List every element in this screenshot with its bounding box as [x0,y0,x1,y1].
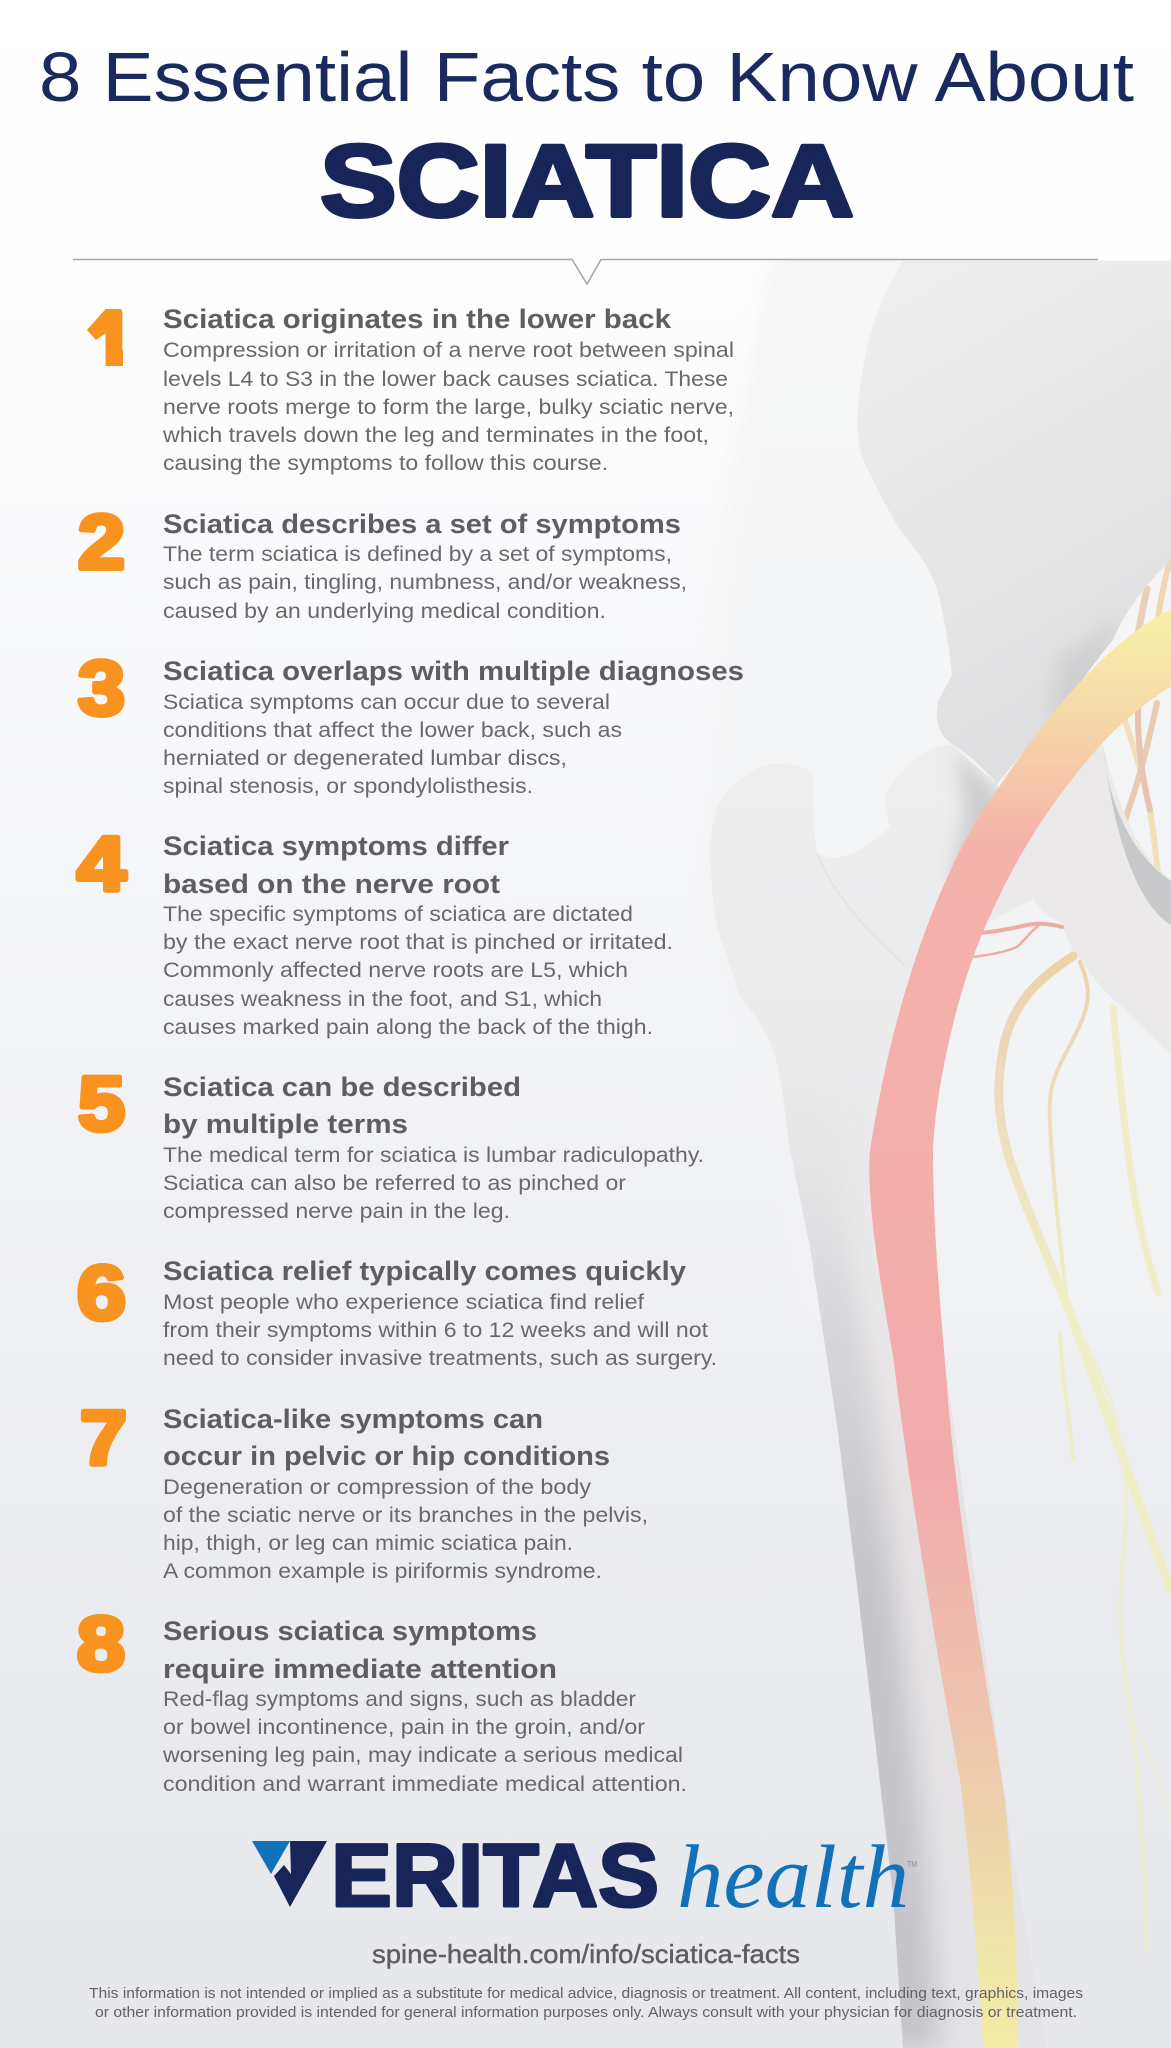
fact 1 heading: Sciatica originates in the lower back [163,304,672,334]
fact 4 body [163,902,673,1039]
fact 3 [78,646,744,798]
fact 3 heading: Sciatica overlaps with multiple diagnoses [163,656,744,686]
fact 6 body: need to consider invasive treatments, such as surgery. [163,1346,717,1370]
fact 6 heading: Sciatica relief typically comes quickly [163,1256,686,1286]
fact 1 body: causing the symptoms to follow this course. [163,451,608,475]
fact 8 heading: require immediate attention [163,1654,557,1684]
pale pelvis backdrop [697,180,1171,1320]
fact 8 body: or bowel incontinence, pain in the groin, and/or [163,1715,645,1739]
sciatic nerve [869,609,1171,2048]
fact 2 body: The term sciatica is defined by a set of symptoms, [163,542,672,566]
fact 8 body [162,1687,687,1796]
Veritas Health logo [252,1825,917,1927]
divider with notch [73,260,1098,284]
fact 7 body: Degeneration or compression of the body [163,1475,591,1499]
fact 7 body: hip, thigh, or leg can mimic sciatica pain. [163,1531,573,1555]
fact 1 body: which travels down the leg and terminates in the foot, [162,423,709,447]
fact 7 body [163,1475,648,1583]
website url: spine-health.com/info/sciatica-facts [372,1939,800,1969]
ischium crescent shadow [1103,744,1171,925]
fact 4 body: Commonly affected nerve roots are L5, which [163,958,628,982]
ilium shadow [1052,628,1112,710]
fact 1 body: nerve roots merge to form the large, bulky sciatic nerve, [163,395,734,419]
number 5: 5 [78,1062,125,1148]
fact 5 body: Sciatica can also be referred to as pinched or [163,1171,626,1195]
fact 4 body: by the exact nerve root that is pinched or irritated. [163,930,673,954]
fact 3 body: conditions that affect the lower back, such as [163,718,622,742]
number 6: 6 [77,1250,126,1336]
fact 7 body: of the sciatic nerve or its branches in the pelvis, [163,1503,648,1527]
fact 8 body: Red-flag symptoms and signs, such as bladder [163,1687,636,1711]
illustration: hip and sciatic nerve [697,180,1171,2048]
fact 7 heading: occur in pelvic or hip conditions [163,1441,610,1471]
number 3: 3 [78,646,125,732]
fact 4 body: The specific symptoms of sciatica are dictated [163,902,633,926]
fact 7 [80,1396,648,1583]
fact 8 [77,1602,687,1796]
fact 6 body: from their symptoms within 6 to 12 weeks and will not [163,1318,708,1342]
fact 2 [78,500,687,623]
number 7: 7 [80,1396,127,1482]
fact 4 [77,822,673,1039]
logo wordmark: ERITAS: ERITAS [331,1825,659,1925]
fact 3 body: spinal stenosis, or spondylolisthesis. [163,774,533,798]
number 4: 4 [77,822,126,908]
femur [711,748,1012,2048]
femur shaft shading [802,1194,946,2048]
fact 4 heading: Sciatica symptoms differ [163,831,510,861]
fact 7 heading [163,1404,610,1471]
fact 5 heading: Sciatica can be described [163,1072,521,1102]
femoral neck shading [948,757,998,874]
fact 8 body: worsening leg pain, may indicate a serious medical [162,1743,683,1767]
fact 5 body: The medical term for sciatica is lumbar radiculopathy. [163,1143,704,1167]
number 2: 2 [78,500,125,586]
fact 1 body: levels L4 to S3 in the lower back causes sciatica. These [163,367,728,391]
fact 5 heading: by multiple terms [163,1109,408,1139]
lower nerve branches [999,956,1171,1952]
fact 3 body [163,690,622,798]
trochanter ridge [817,853,905,965]
fact 5 [78,1062,704,1223]
fact 5 heading [163,1072,521,1139]
number 8: 8 [77,1602,125,1688]
number 1: 1 [78,297,130,383]
fact 1 body [162,338,734,475]
fact 5 body [163,1143,704,1223]
fact 7 heading: Sciatica-like symptoms can [163,1404,543,1434]
thin nerve strands upper right [1122,560,1171,872]
fact 3 body: Sciatica symptoms can occur due to several [163,690,610,714]
logo mark: V [252,1841,327,1907]
fact 6 body: Most people who experience sciatica find relief [163,1290,644,1314]
trademark: TM [907,1860,917,1869]
fact 2 body: caused by an underlying medical condition. [163,599,606,623]
fact 1 [78,297,734,475]
logo wordmark: health: health [677,1828,909,1927]
disclaimer [89,1986,1083,2021]
fact 4 heading: based on the nerve root [163,869,500,899]
fact 6 [77,1250,717,1370]
disclaimer: This information is not intended or implied as a substitute for medical advice, diagnosis or treatment. All content, including text, graphics, images [89,1986,1083,2002]
fact 7 body: A common example is piriformis syndrome. [163,1559,602,1583]
main heading: SCIATICA: SCIATICA [320,124,854,238]
fact 3 body: herniated or degenerated lumbar discs, [163,746,567,770]
femoral vessels [972,924,1062,957]
title line: 8 Essential Facts to Know About [39,38,1134,116]
fact 4 heading [163,831,510,899]
fact 8 heading: Serious sciatica symptoms [163,1616,537,1646]
disclaimer: or other information provided is intended for general information purposes only. Always consult with your physician for diagnosis or treatment. [95,2005,1077,2021]
fact 2 heading: Sciatica describes a set of symptoms [163,509,681,539]
fact 8 body: condition and warrant immediate medical attention. [163,1772,687,1796]
fact 4 body: causes marked pain along the back of the thigh. [163,1015,653,1039]
fact 6 body [163,1290,717,1370]
fact 1 body: Compression or irritation of a nerve root between spinal [163,338,734,362]
fact 2 body [163,542,687,623]
ischium [1020,744,1171,1054]
ilium [857,261,1171,784]
fact 5 body: compressed nerve pain in the leg. [163,1199,510,1223]
fact 2 body: such as pain, tingling, numbness, and/or weakness, [163,570,687,594]
fact 8 heading [163,1616,557,1684]
fact 4 body: causes weakness in the foot, and S1, which [163,987,602,1011]
